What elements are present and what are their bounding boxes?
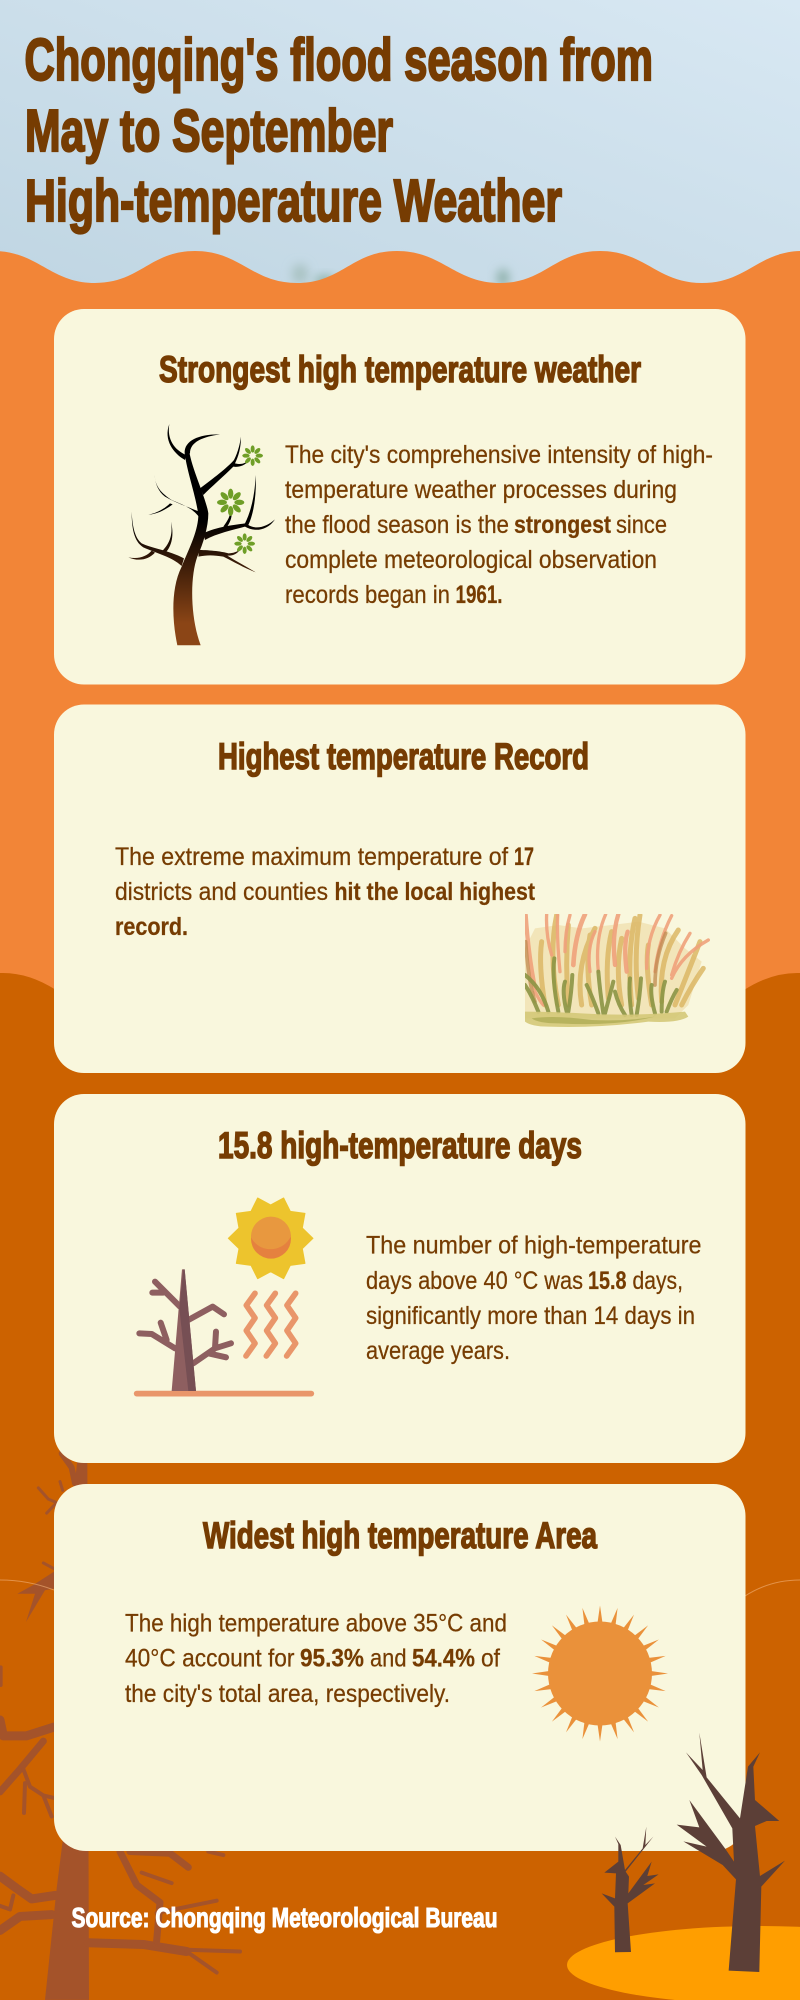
title: May to September — [25, 98, 393, 164]
body text: area: 40°C account for — [125, 1644, 294, 1672]
illustration: watercolor grass — [525, 914, 708, 1027]
faded large tree — [0, 1454, 240, 2000]
body text: area — [125, 1610, 507, 1708]
body text: strongest — [285, 441, 713, 609]
body text: days: days above 40 °C was — [366, 1267, 583, 1295]
heading: area: Widest high temperature Area — [203, 1515, 597, 1556]
body text: days — [366, 1232, 702, 1365]
body text: area: of — [481, 1644, 500, 1672]
dark orange hill background — [0, 973, 800, 2000]
body text: area: The high temperature above 35°C and — [125, 1610, 507, 1638]
large bare tree — [677, 1733, 785, 1972]
source: Source: Chongqing Meteorological Bureau — [72, 1902, 498, 1933]
panel: highest temperature record — [54, 704, 746, 1073]
body text: strongest: the flood season is the — [285, 511, 509, 539]
body text: area: 95.3% — [300, 1644, 364, 1672]
body text: strongest: records began in — [285, 581, 450, 609]
body text: record — [115, 843, 536, 941]
body text: days: significantly more than 14 days in — [366, 1302, 695, 1330]
body text: strongest: temperature weather processes during — [285, 476, 677, 504]
heading: record: Highest temperature Record — [218, 736, 589, 777]
panel: 15.8 high-temperature days — [54, 1094, 746, 1463]
body text: days: 15.8 — [588, 1267, 627, 1295]
orange wave background — [0, 251, 800, 1000]
icon: sun, heat waves and bare tree — [137, 1198, 313, 1394]
body text: area: 54.4% — [412, 1644, 475, 1672]
body text: record: record. — [115, 913, 188, 941]
body text: strongest: strongest — [514, 511, 612, 539]
sky background — [0, 0, 800, 300]
body text: strongest: complete meteorological observation — [285, 546, 657, 574]
body text: record: 17 — [514, 843, 534, 871]
body text: days: average years. — [366, 1337, 510, 1365]
faint arcs — [0, 1580, 800, 1596]
body text: area: and — [370, 1644, 406, 1672]
ground ellipse — [567, 1926, 800, 2000]
panel: widest high temperature area — [54, 1484, 746, 1851]
body text: strongest: The city's comprehensive intensity of high- — [285, 441, 713, 469]
body text: record: The extreme maximum temperature of — [115, 843, 508, 871]
body text: days: The number of high-temperature — [366, 1232, 702, 1260]
body text: area: the city's total area, respectively. — [125, 1680, 450, 1708]
icon: orange sun — [532, 1606, 668, 1742]
small bare tree — [602, 1827, 659, 1952]
body text: strongest: since — [616, 511, 667, 539]
body text: days: days, — [632, 1267, 683, 1295]
body text: record: districts and counties — [115, 878, 328, 906]
panel: strongest high temperature weather — [54, 309, 746, 684]
heading: strongest: Strongest high temperature weather — [159, 349, 641, 390]
body text: record: hit the local highest — [334, 878, 536, 906]
heading: days: 15.8 high-temperature days — [218, 1125, 582, 1166]
body text: strongest: 1961. — [456, 581, 502, 609]
title — [24, 27, 653, 234]
icon: tree with leaves — [128, 424, 275, 645]
bare trees — [602, 1733, 785, 1972]
title: High-temperature Weather — [25, 168, 562, 234]
